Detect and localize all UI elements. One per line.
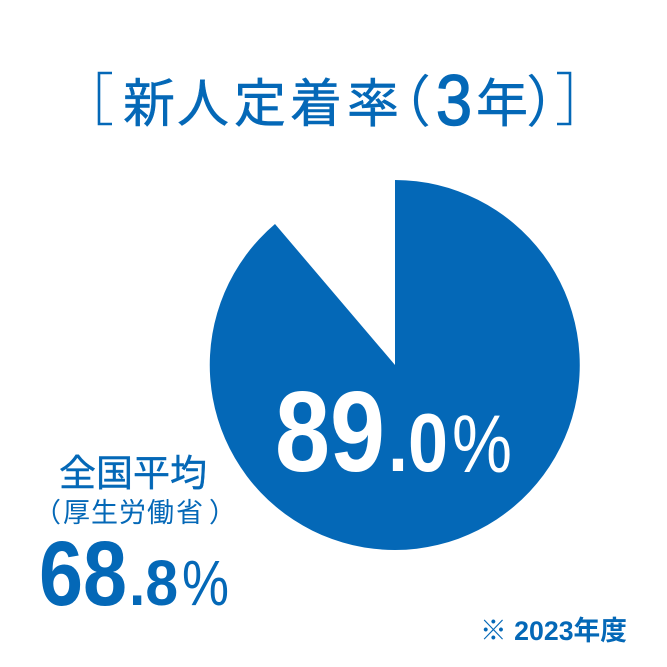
label: national average: 国: [96, 453, 133, 494]
pie chart: 89.0%: [210, 180, 580, 550]
value: 89.0%: 89: [275, 369, 385, 496]
label: source ministry: 厚: [63, 498, 90, 528]
label: national average: 平: [133, 453, 170, 494]
national average label: [34, 453, 236, 528]
title text: 人: [177, 76, 229, 134]
title text: 着: [290, 76, 342, 134]
value: 89.0%: [275, 369, 512, 496]
value: 89.0%: %: [452, 399, 512, 490]
title text: 率: [347, 76, 399, 134]
footnote: 2023: ※ 2023年度: [480, 616, 627, 646]
label: source ministry: ）: [209, 498, 236, 528]
label: source ministry: 働: [147, 498, 174, 528]
label: source ministry: 省: [176, 498, 203, 528]
label: national average: 均: [170, 453, 207, 494]
label: national average: 全: [59, 453, 96, 494]
title right bracket: [557, 73, 570, 124]
value: 68.8%: .8: [129, 547, 178, 619]
title: [99, 62, 582, 141]
title parenthetical: [375, 62, 582, 141]
digit 3: 3: [436, 62, 472, 141]
label: source ministry: （: [34, 498, 61, 528]
label: source ministry: 生: [91, 498, 118, 528]
label: source ministry: 労: [119, 498, 146, 528]
open parenthesis: （: [375, 71, 431, 134]
value: 68.8%: 68: [39, 523, 127, 625]
close parenthesis: ）: [526, 71, 582, 134]
title left bracket: [99, 73, 112, 124]
value: 68.8%: [39, 523, 229, 625]
value: 89.0%: .0: [388, 396, 448, 489]
title text: 新: [123, 76, 175, 134]
year character: 年: [476, 76, 528, 134]
title text: 定: [234, 76, 286, 134]
value: 68.8%: %: [182, 547, 229, 619]
